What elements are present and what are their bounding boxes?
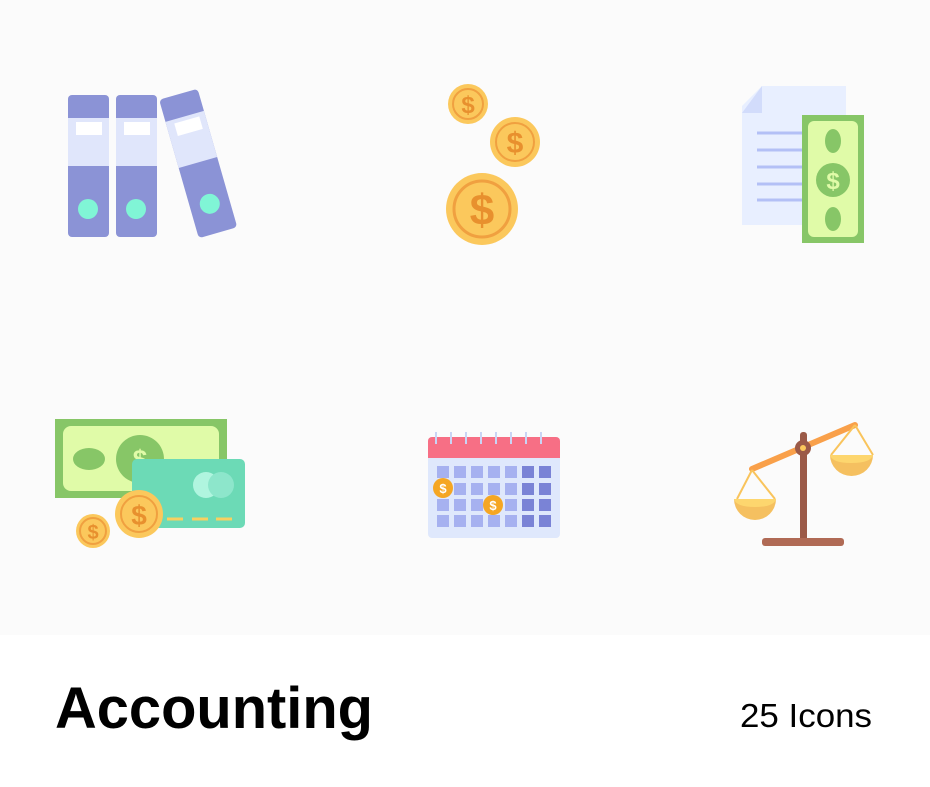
icon: coins: $	[507, 127, 524, 160]
icon: money and card: $	[87, 522, 99, 544]
icon: coins	[446, 84, 540, 245]
icon: money and card: $	[133, 444, 148, 474]
icon: document with dollar bill: $	[826, 168, 840, 195]
icon: balance scale	[734, 425, 873, 546]
icon: money and card: $	[131, 500, 147, 531]
title: Accounting	[55, 676, 373, 741]
icon: calendar: $	[489, 498, 497, 513]
icon: money and card	[55, 419, 245, 548]
icon: binders	[68, 89, 237, 238]
icon: coins: $	[461, 92, 475, 119]
icon: document with dollar bill	[742, 86, 864, 243]
icon: calendar: $	[439, 481, 447, 496]
subtitle: icon count: 25 Icons	[740, 697, 872, 734]
icon: coins: $	[470, 186, 494, 235]
icon: calendar	[428, 432, 560, 538]
